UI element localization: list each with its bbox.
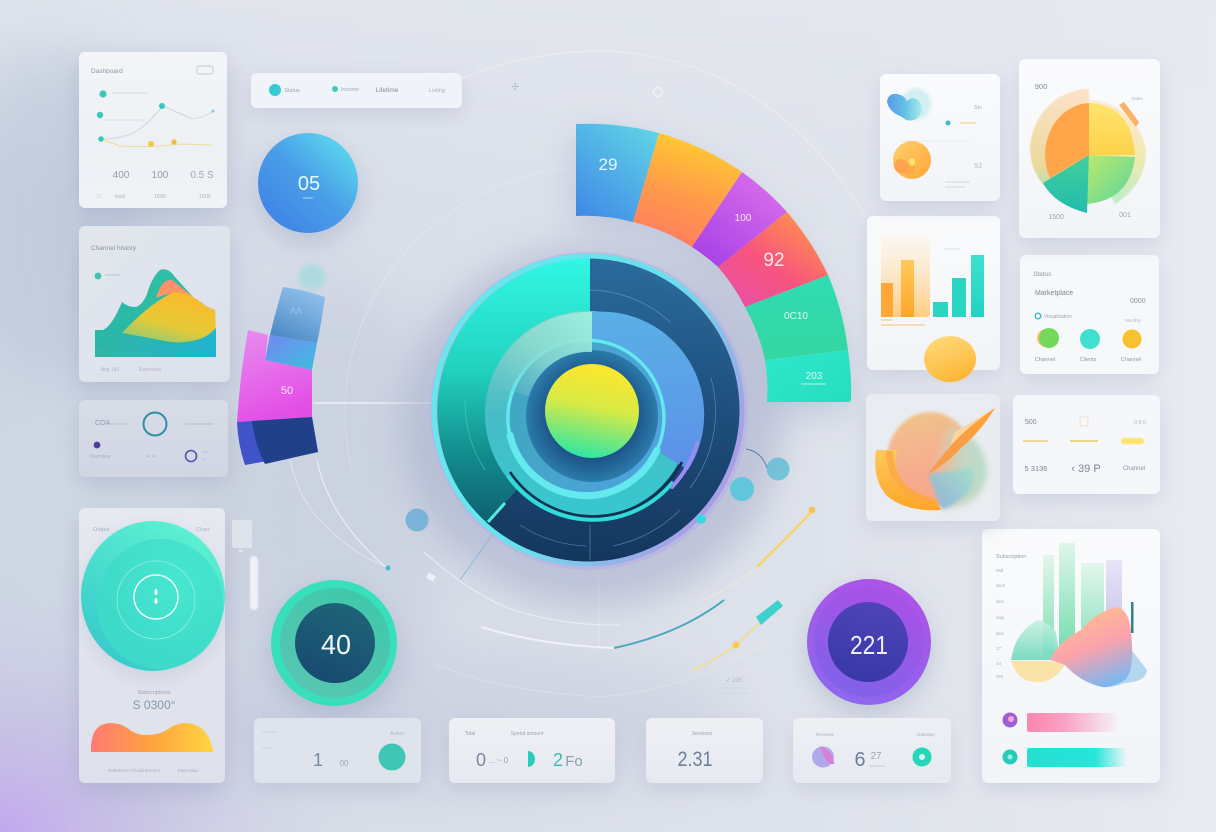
inner ring <box>485 311 691 517</box>
panel: pie chart card: 001 <box>1119 212 1131 219</box>
panel: legend bar: Lifetime <box>376 87 399 94</box>
bottom card 4: Revenue <box>816 732 835 737</box>
panel: stats grid card: ‹ 39 P <box>1071 463 1101 475</box>
panel: blobs card: Sm <box>974 105 982 111</box>
line chart <box>97 90 215 147</box>
metric circle: 221: 221 <box>850 630 888 660</box>
panel: legend dots card: Channel <box>1035 357 1055 363</box>
core disk <box>508 340 664 496</box>
segment 100 <box>692 172 787 267</box>
panel: line chart card: total <box>115 194 125 200</box>
panel: ring stats card: Overview <box>90 454 111 460</box>
icon: petal <box>812 746 834 768</box>
panel: legend dots card: Marketplace <box>1035 290 1073 297</box>
bottom card 2: Fo <box>565 753 583 770</box>
bottom card 4 <box>793 718 951 783</box>
panel: legend bar: Income <box>341 87 359 93</box>
metric circle: 40 <box>271 580 397 706</box>
outer teal sector <box>437 258 590 523</box>
slider widgets <box>232 520 258 610</box>
outer navy sector <box>486 257 742 563</box>
icon: blue blob <box>887 88 931 121</box>
panel: teal dial card: Output <box>93 527 110 533</box>
icon: orange blob <box>893 141 931 179</box>
panel: legend dots card: Clients <box>1080 357 1097 363</box>
bottom card 2 <box>449 718 615 783</box>
bottom card 3: Sessions <box>692 731 713 737</box>
metric circle: 05: 05 <box>298 173 320 195</box>
axis labels: Sum <box>996 583 1006 588</box>
outer arc segments: 92 <box>763 250 785 271</box>
bottom card 3 <box>646 718 763 783</box>
panel: pie chart card: Sales <box>1131 96 1143 101</box>
segment orange <box>633 133 742 247</box>
axis labels: Dec <box>996 631 1005 636</box>
metric circle: 05 <box>258 133 358 233</box>
segment 0C10 <box>745 275 848 360</box>
bars <box>1043 543 1122 655</box>
panel: line chart card <box>79 52 227 208</box>
panel: mixed chart card: Subscription <box>996 554 1026 560</box>
bottom card 2: 2 <box>553 750 563 770</box>
panel: line chart card: 1505 <box>154 194 166 200</box>
panel: stats grid card: Channel <box>1123 466 1145 472</box>
yellow track and teal connector <box>614 507 815 693</box>
outer arc segments: 29 <box>599 155 617 174</box>
panel: legend bar <box>251 73 462 108</box>
bottom card 2: ... ~ 0 <box>488 756 509 765</box>
icon: teal badge <box>912 748 932 766</box>
axis labels: Mid <box>996 568 1004 573</box>
panel: teal dial card: Total value <box>177 768 199 773</box>
bottom card 2: Total <box>465 731 475 737</box>
bottom card 2: Spend amount <box>511 731 544 737</box>
segment 29 <box>576 124 659 222</box>
icon: small dot <box>94 442 100 448</box>
bottom card 3: 2.31 <box>678 748 712 771</box>
bars <box>881 236 984 317</box>
accent arcs <box>508 476 673 520</box>
outer arc segments: 203 <box>806 371 823 382</box>
central donut chart <box>402 246 782 606</box>
panel: stats grid card: 5 3136 <box>1025 464 1047 473</box>
bottom card 4: 27 <box>870 751 882 762</box>
axis labels: 44 <box>996 661 1002 666</box>
card title: Dashboard <box>91 68 123 75</box>
outer arc segments <box>576 124 851 412</box>
panel: area chart card: Expenses <box>139 367 161 373</box>
panel: ring stats card: COA <box>95 420 110 427</box>
segment values: ʌʌ <box>290 303 302 317</box>
panel: stats grid card: 500 <box>1025 419 1037 426</box>
stat numbers: 400 <box>113 170 130 181</box>
bottom card 1: 1 <box>313 750 323 770</box>
panel: legend dots card: 0000 <box>1130 298 1146 305</box>
bottom card 1 <box>254 718 421 783</box>
pale wedge <box>490 312 592 396</box>
pie chart <box>1030 89 1146 213</box>
card title: Channel history <box>91 245 137 252</box>
outer arc segments: 100 <box>735 213 752 224</box>
legend dots <box>1037 328 1142 349</box>
wave chart <box>91 723 214 752</box>
axis labels: 27 <box>996 646 1002 651</box>
bottom card 4: Gateway <box>917 732 936 737</box>
bottom card 1: Active <box>390 731 404 737</box>
panel: ring stats card <box>79 400 228 477</box>
outer arc segments: 0C10 <box>784 311 808 322</box>
left arc segments <box>237 264 325 465</box>
icon: ring <box>144 412 166 436</box>
left arc segments: 50 <box>281 385 293 397</box>
axis labels: Sap <box>996 615 1005 620</box>
panel: teal dial card: Subscriptions <box>137 690 171 696</box>
metric circle: 40: 40 <box>321 629 351 660</box>
orbit lines <box>290 51 866 697</box>
axis labels: DM <box>996 674 1003 679</box>
panel: legend bar: Listing <box>429 88 445 94</box>
panel: line chart card: 1500 <box>199 194 211 200</box>
panel: legend dots card: Channel <box>1121 357 1141 363</box>
panel: line chart card: 0.5 S <box>190 170 214 181</box>
floating dots and connector <box>406 449 790 532</box>
panel: area chart card <box>79 226 230 382</box>
value: S 0300° <box>133 698 176 712</box>
panel: teal dial card <box>79 508 225 783</box>
axis labels: Dim <box>996 599 1004 604</box>
center sphere <box>545 364 639 458</box>
panel: mixed chart card <box>982 529 1160 783</box>
axis labels <box>996 568 1006 679</box>
panel: teal dial card: Chart <box>196 527 210 533</box>
legend bars <box>1002 712 1127 767</box>
blob chart <box>875 408 995 510</box>
panel: bar chart card <box>867 216 1000 382</box>
donut hairlines <box>520 290 716 560</box>
panel: legend dots card: Visualization <box>1044 314 1072 320</box>
panel: stats grid card: 0 9 0 <box>1134 420 1146 426</box>
bottom card 2: 0 <box>476 750 486 770</box>
panel: blobs card: 5J <box>974 163 982 170</box>
panel: legend bar: Status <box>284 88 300 94</box>
yellow track and teal connector: ✓ 205 <box>726 678 743 684</box>
panel: teal dial card: Reference of total amount <box>108 768 161 773</box>
bottom card 4: 6 <box>854 749 866 771</box>
bottom card 1: 00 <box>340 759 349 768</box>
dial <box>81 521 225 671</box>
segment 203 <box>765 350 851 402</box>
panel: line chart card: 100 <box>152 170 169 181</box>
metric circle: 221 <box>807 579 931 705</box>
panel: pie chart card <box>1019 59 1160 238</box>
icon: orange ball <box>924 336 976 382</box>
panel: legend dots card: Status <box>1033 271 1052 278</box>
icon: violet ring <box>186 450 196 462</box>
orbit markers <box>386 82 662 582</box>
panel: pie chart card: 1500 <box>1048 214 1064 221</box>
panel: legend dots card <box>1020 255 1159 374</box>
panel: ring stats card: ⌄⌄ <box>145 452 157 459</box>
orbit markers: ✢ <box>511 82 519 93</box>
blobs <box>1011 602 1147 687</box>
segment 92 <box>718 212 828 307</box>
panel: area chart card: Avg 140 <box>101 367 119 373</box>
panel: legend dots card: Monthly <box>1125 318 1142 323</box>
panel: blobs card <box>880 74 1000 201</box>
metric circle: 05: score <box>303 195 314 200</box>
panel: line chart card: □ <box>97 194 101 200</box>
panel: pie chart card: 900 <box>1035 82 1047 91</box>
panel: orange blob card <box>866 394 1000 521</box>
panel: stats grid card <box>1013 395 1160 494</box>
area chart <box>95 269 216 357</box>
